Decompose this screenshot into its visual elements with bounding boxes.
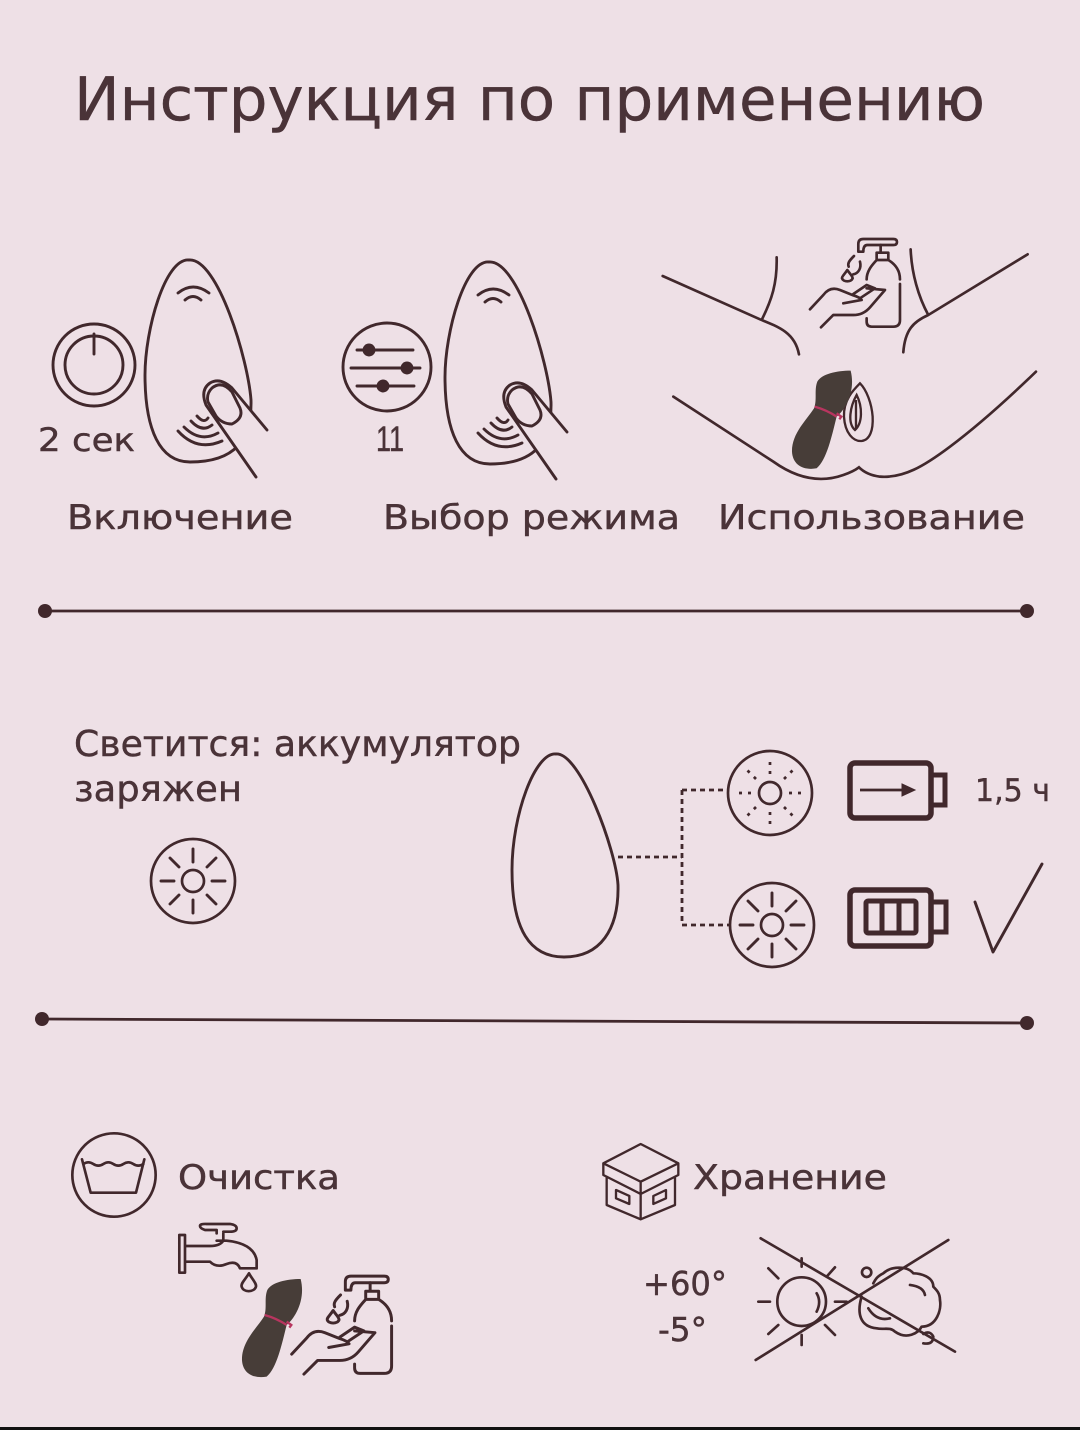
icon: check mark (975, 864, 1042, 952)
icon: device outline (512, 754, 618, 957)
panel: storage (603, 1144, 955, 1360)
mode count: 11 (376, 420, 404, 459)
panel: cleaning (72, 1133, 392, 1377)
icon: no sun and no moisture (756, 1238, 955, 1360)
step label: Включение (67, 498, 293, 538)
temperature range: -5° (658, 1310, 707, 1349)
illustration: device under water (242, 1279, 302, 1377)
icon: lit indicator (730, 883, 814, 967)
duration label: 2 сек (38, 421, 135, 459)
icon: device with finger press (445, 262, 567, 479)
icon: charging battery (850, 763, 945, 818)
text block: charged note: заряжен (74, 769, 242, 810)
bottom edge (0, 1427, 1080, 1430)
dotted connectors (618, 790, 730, 925)
icon: lit indicator (151, 839, 235, 923)
icon: sliders (343, 323, 431, 411)
text block: charged note: Светится: аккумулятор (74, 724, 521, 765)
illustration: usage (663, 239, 1036, 479)
panel: mode select step (343, 262, 680, 538)
panel: usage step (663, 239, 1036, 538)
step label: Использование (718, 498, 1025, 538)
step label: Выбор режима (383, 498, 680, 538)
icon: blinking indicator (728, 751, 812, 835)
title: Инструкция по применению (74, 65, 985, 135)
panel: charging indicator (74, 724, 1050, 967)
heading: Хранение (693, 1158, 887, 1198)
charge time: 1,5 ч (975, 773, 1050, 809)
icon: wash basin (72, 1133, 156, 1217)
icon: box (603, 1144, 678, 1219)
icon: faucet (179, 1224, 257, 1291)
icon: soap and hands (292, 1276, 392, 1374)
icon: full battery (850, 890, 946, 946)
icon: power button (53, 324, 135, 406)
panel: power on step (38, 260, 293, 538)
heading: Очистка (178, 1158, 340, 1198)
temperature range: +60° (643, 1264, 727, 1303)
icon: device with finger press (145, 260, 267, 477)
